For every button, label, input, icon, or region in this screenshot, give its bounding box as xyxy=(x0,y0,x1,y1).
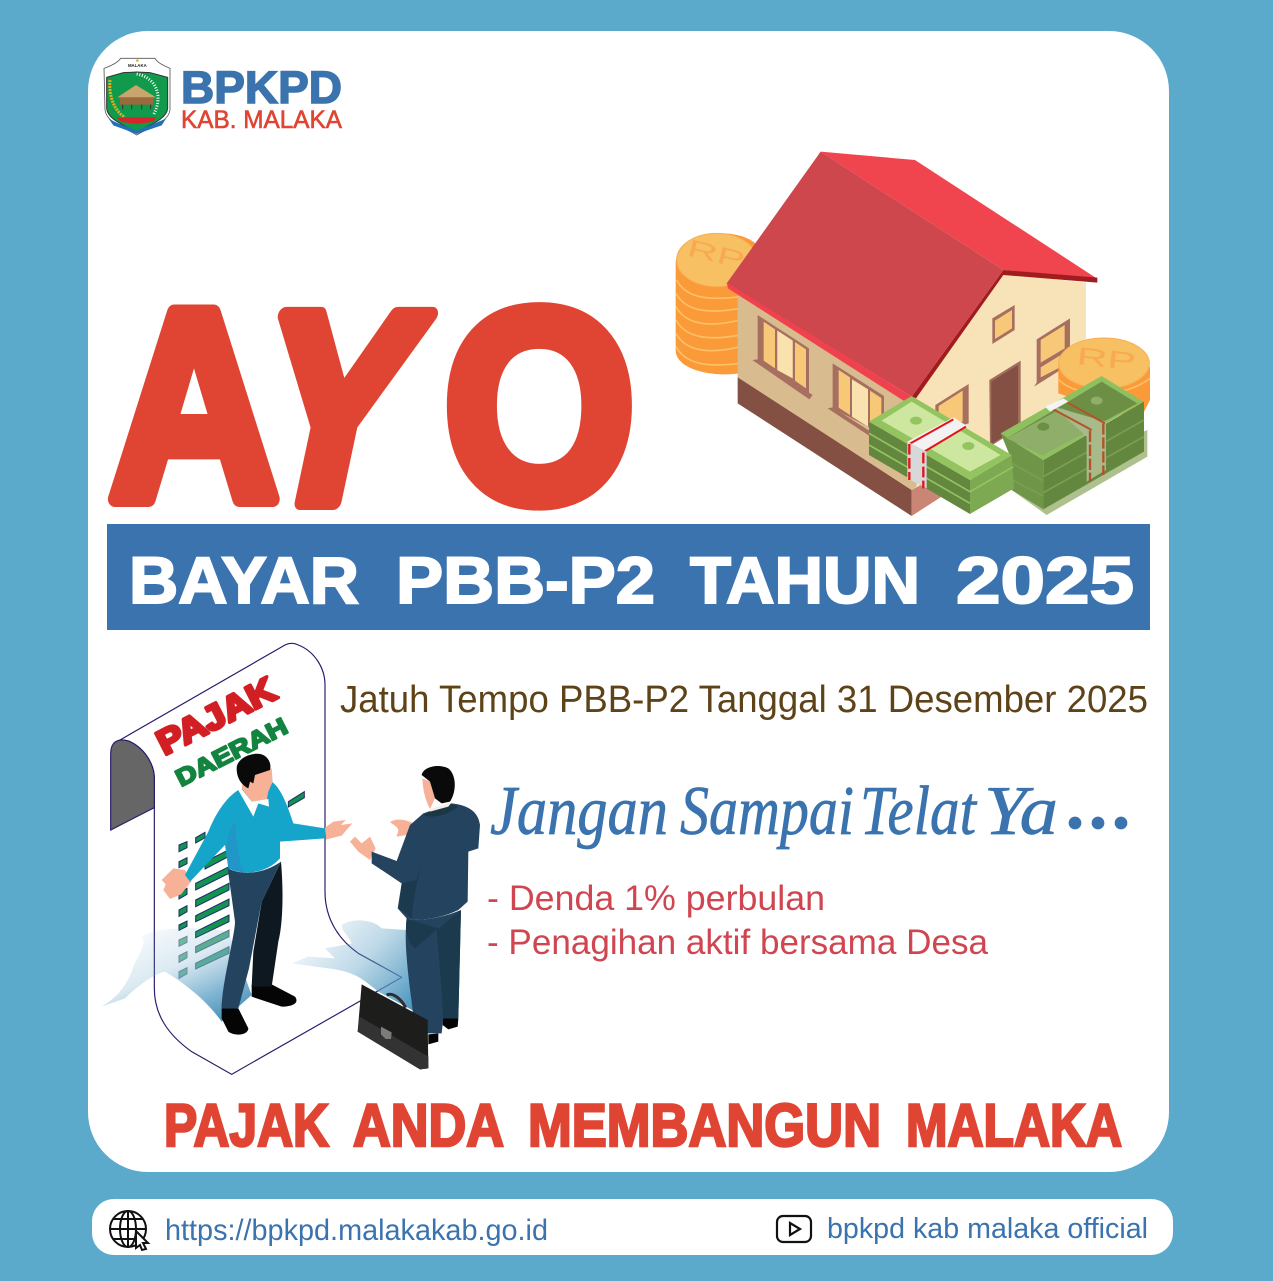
scroll fold xyxy=(111,740,154,830)
window 1 xyxy=(752,315,813,399)
slogan: ANDA xyxy=(353,1092,504,1159)
window small gable xyxy=(992,305,1015,344)
coin stack right: RP xyxy=(1075,343,1137,376)
banner title: BAYAR PBB-P2 TAHUN 2025: PBB-P2 xyxy=(396,543,655,617)
icon: globe with cursor xyxy=(110,1211,148,1250)
slogan xyxy=(164,1092,1122,1159)
penalty bullet points xyxy=(487,879,989,962)
coin stack left: RP xyxy=(685,235,748,275)
icon: youtube play xyxy=(777,1216,811,1242)
wall long side xyxy=(738,295,917,490)
base of house xyxy=(738,377,912,516)
document scroll xyxy=(120,643,402,1074)
banner title: BAYAR PBB-P2 TAHUN 2025 xyxy=(129,543,1134,617)
script heading xyxy=(490,773,1127,850)
footer bar xyxy=(92,1199,1173,1255)
wall gable side xyxy=(913,273,1086,487)
roof eave dark xyxy=(912,270,1097,398)
headline: AYO xyxy=(109,254,635,560)
man in blue sweater xyxy=(162,754,352,1035)
main white panel xyxy=(88,31,1169,1172)
banner xyxy=(107,524,1150,630)
roof back slope xyxy=(821,152,1097,278)
banner title: BAYAR PBB-P2 TAHUN 2025: TAHUN xyxy=(690,543,920,617)
headline: AYO: O xyxy=(444,254,635,558)
money stack right xyxy=(1001,376,1147,515)
roof front slope xyxy=(727,152,1003,397)
script heading: Ya xyxy=(984,773,1058,850)
banner title: BAYAR PBB-P2 TAHUN 2025: BAYAR xyxy=(129,543,359,617)
document title: DAERAH: DAERAH xyxy=(171,713,292,792)
slogan: PAJAK xyxy=(164,1092,329,1159)
youtube channel: bpkpd kab malaka official xyxy=(827,1213,1148,1245)
logo text: KAB. MALAKA: KAB. MALAKA xyxy=(181,106,342,134)
checklist rows xyxy=(179,792,304,978)
coin stack left xyxy=(676,233,760,374)
logo: BPKPD emblem xyxy=(104,58,170,135)
slogan: MEMBANGUN xyxy=(528,1092,881,1159)
headline: AYO: Y xyxy=(229,257,447,560)
penalty bullet points: - Penagihan aktif bersama Desa xyxy=(487,923,989,962)
door xyxy=(989,361,1021,447)
due date text: Jatuh Tempo PBB-P2 Tanggal 31 Desember 2025 xyxy=(340,679,1148,721)
logo: BPKPD emblem: MALAKA xyxy=(128,63,148,68)
script heading: Jangan xyxy=(490,773,668,850)
window lower gable xyxy=(935,384,969,433)
window 2 xyxy=(828,363,884,437)
money stack left xyxy=(869,396,1014,514)
slogan: MALAKA xyxy=(906,1092,1122,1159)
logo text: BPKPD: BPKPD xyxy=(181,62,342,113)
script heading: Sampai xyxy=(680,773,854,850)
document title: PAJAK: PAJAK xyxy=(151,671,282,763)
shadow right figure xyxy=(292,920,415,1012)
banner title: BAYAR PBB-P2 TAHUN 2025: 2025 xyxy=(956,543,1134,617)
website url: https://bpkpd.malakakab.go.id xyxy=(165,1214,548,1247)
script heading: Telat xyxy=(860,773,977,850)
roof red edge xyxy=(727,283,912,402)
window right gable xyxy=(1034,318,1070,387)
illustration: house with coins and money xyxy=(676,152,1150,516)
coin stack right xyxy=(1058,338,1150,420)
headline: AYO: A xyxy=(109,255,279,557)
briefcase xyxy=(358,984,428,1069)
penalty bullet points: - Denda 1% perbulan xyxy=(487,879,825,918)
illustration: two men discussing tax document xyxy=(102,643,480,1074)
shadow left figure xyxy=(102,928,252,1022)
man in dark suit xyxy=(350,766,480,1044)
